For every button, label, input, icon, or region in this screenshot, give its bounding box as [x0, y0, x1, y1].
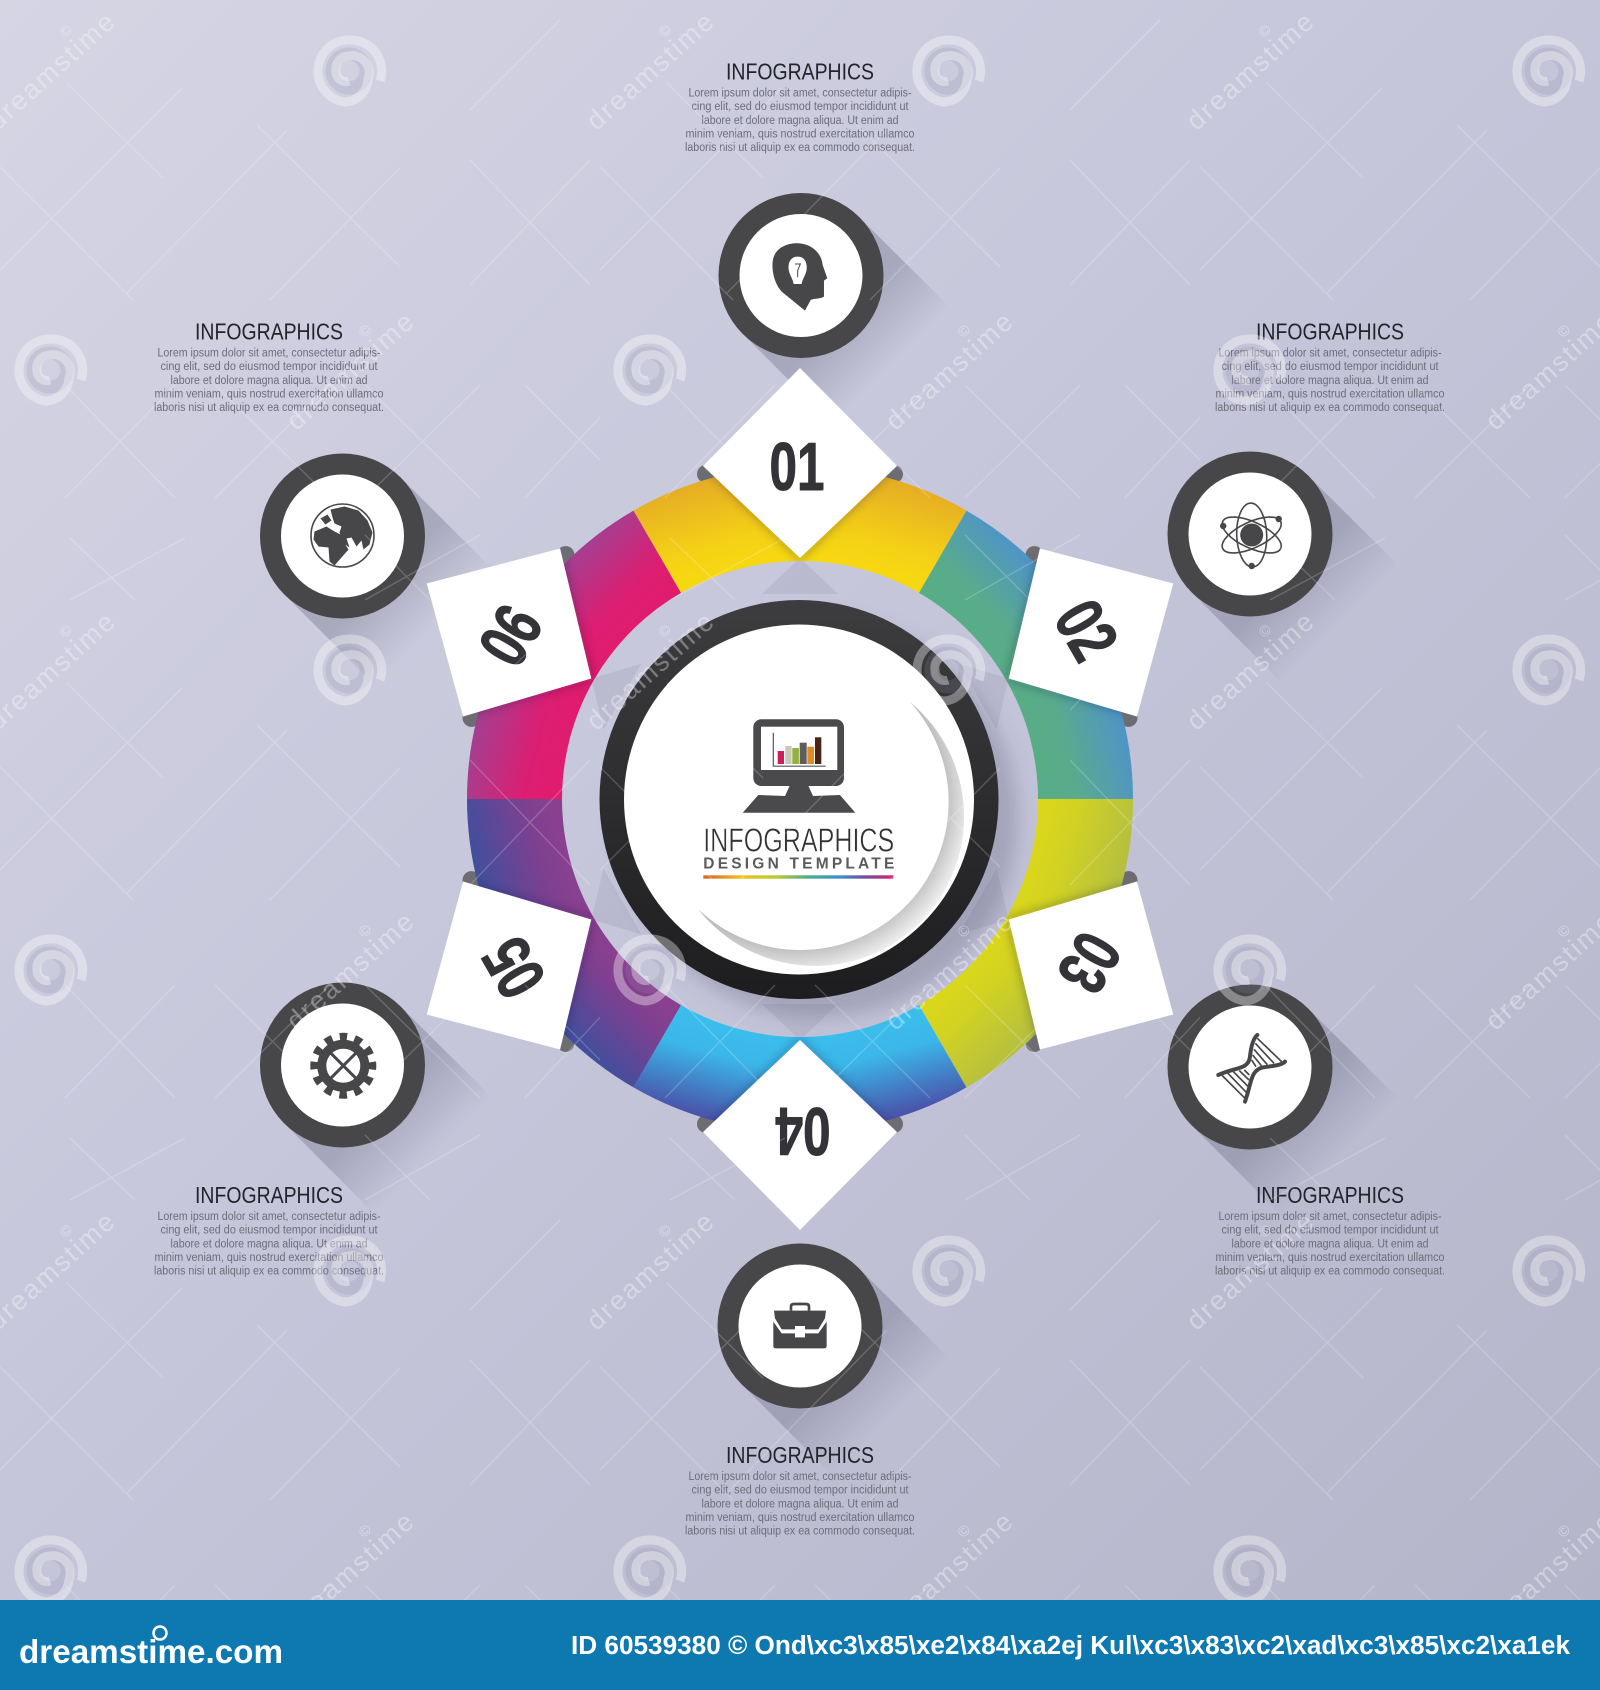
watermark overlay: ©	[355, 321, 375, 341]
watermark overlay: dreamstime	[879, 907, 1018, 1036]
text block 06: Lorem ipsum dolor sit amet, consectetur adipis-	[158, 348, 381, 360]
watermark overlay: dreamstime	[580, 607, 719, 736]
inner disc shading	[572, 558, 1028, 1040]
center subtitle: DESIGN TEMPLATE	[703, 855, 894, 872]
watermark overlay: dreamstime	[1180, 7, 1319, 136]
text block 04	[685, 1442, 915, 1538]
watermark overlay: ©	[355, 1521, 375, 1541]
center badge	[600, 600, 998, 999]
node 06: globe	[260, 454, 492, 686]
icon: gear	[314, 1037, 372, 1095]
segment 05 purple	[428, 758, 705, 1110]
watermark overlay: ©	[56, 621, 76, 641]
watermark overlay: ©	[1255, 1221, 1275, 1241]
text block 05	[154, 1182, 384, 1278]
text block 04: minim veniam, quis nostrud exercitation ullamco	[686, 1512, 914, 1524]
text block 06	[154, 318, 384, 414]
text block 03: minim veniam, quis nostrud exercitation ullamco	[1216, 1252, 1444, 1264]
text block 02: cing elit, sed do eiusmod tempor incididunt ut	[1222, 361, 1439, 373]
text block 01	[685, 58, 915, 154]
segment 02 green	[895, 488, 1172, 840]
watermark overlay: dreamstime	[280, 1507, 419, 1636]
text block 01: Lorem ipsum dolor sit amet, consectetur adipis-	[688, 88, 912, 100]
watermark overlay: dreamstime	[580, 1207, 719, 1336]
segment 01 yellow	[634, 466, 966, 593]
segment 04 cyan	[634, 1005, 966, 1132]
node 02: atom	[1168, 452, 1400, 684]
text block 04: INFOGRAPHICS	[726, 1442, 874, 1468]
watermark overlay: dreamstime	[879, 1507, 1018, 1636]
text block 01: minim veniam, quis nostrud exercitation ullamco	[686, 128, 914, 140]
icon: globe	[311, 504, 374, 567]
segment 06 magenta	[428, 488, 705, 840]
watermark overlay: dreamstime	[580, 7, 719, 136]
text block 02: laboris nisi ut aliquip ex ea commodo consequat.	[1215, 402, 1445, 414]
tab corners behind the ring	[459, 465, 1141, 1133]
watermark overlay: dreamstime	[1180, 607, 1319, 736]
footer logo: dreamstime.com	[19, 1633, 283, 1670]
text block 03: laboris nisi ut aliquip ex ea commodo consequat.	[1215, 1266, 1445, 1278]
text block 03	[1215, 1182, 1445, 1278]
text block 02: labore et dolore magna aliqua. Ut enim ad	[1232, 375, 1428, 387]
watermark overlay: ©	[954, 321, 974, 341]
text block 06: laboris nisi ut aliquip ex ea commodo consequat.	[154, 402, 384, 414]
watermark overlay: dreamstime	[1180, 1207, 1319, 1336]
text block 03: Lorem ipsum dolor sit amet, consectetur adipis-	[1218, 1211, 1442, 1223]
text block 06: INFOGRAPHICS	[195, 318, 343, 344]
rainbow underline	[703, 875, 893, 879]
footer credit: ID 60539380 © Ond\xc3\x85\xe2\x84\xa2ej Kul\xc3\x83\xc2\xad\xc3\x85\xc2\xa1ek	[571, 1632, 1571, 1660]
number tab 01	[703, 368, 897, 558]
number tab 03	[960, 835, 1222, 1099]
text block 03: cing elit, sed do eiusmod tempor incididunt ut	[1222, 1225, 1439, 1237]
center title: INFOGRAPHICS	[703, 821, 894, 858]
text block 03: labore et dolore magna aliqua. Ut enim ad	[1232, 1238, 1428, 1250]
watermark overlay: ©	[1554, 921, 1574, 941]
watermark overlay: ©	[655, 21, 675, 41]
watermark overlay: ©	[355, 921, 375, 941]
number tab 06	[378, 499, 640, 763]
text block 06: cing elit, sed do eiusmod tempor incididunt ut	[160, 361, 378, 373]
text block 02: Lorem ipsum dolor sit amet, consectetur adipis-	[1218, 348, 1442, 360]
watermark overlay: dreamstime	[879, 307, 1018, 436]
number tab 05	[378, 835, 640, 1099]
text block 01: cing elit, sed do eiusmod tempor incididunt ut	[692, 101, 909, 113]
text block 02	[1215, 318, 1445, 414]
text block 05: cing elit, sed do eiusmod tempor incididunt ut	[160, 1225, 378, 1237]
node 01: head with lightbulb	[718, 193, 951, 426]
text block 06: minim veniam, quis nostrud exercitation ullamco	[154, 388, 384, 400]
text block 04: labore et dolore magna aliqua. Ut enim ad	[702, 1498, 898, 1510]
text block 01: laboris nisi ut aliquip ex ea commodo consequat.	[685, 142, 915, 154]
footer logo spiral	[154, 1626, 166, 1640]
watermark overlay: dreamstime	[280, 307, 419, 436]
text block 02: minim veniam, quis nostrud exercitation ullamco	[1216, 388, 1444, 400]
watermark overlay: ©	[954, 1521, 974, 1541]
text block 01: labore et dolore magna aliqua. Ut enim ad	[702, 115, 898, 127]
watermark overlay: ©	[56, 1221, 76, 1241]
number tab 05: 05	[467, 925, 561, 1010]
number tab 01: 01	[770, 429, 824, 505]
watermark overlay: dreamstime	[280, 907, 419, 1036]
panel: central ring diagram	[426, 368, 1174, 1230]
watermark overlay: ©	[655, 621, 675, 641]
number tab 04: 04	[775, 1093, 830, 1169]
segment 03 lime	[895, 758, 1172, 1110]
text block 03: INFOGRAPHICS	[1256, 1182, 1404, 1208]
text block 02: INFOGRAPHICS	[1256, 318, 1404, 344]
number tab 04	[703, 1040, 897, 1230]
text block 06: labore et dolore magna aliqua. Ut enim ad	[170, 375, 368, 387]
node 05: gear	[260, 982, 492, 1215]
icon: DNA helix	[1218, 1035, 1285, 1102]
watermark overlay: ©	[1255, 21, 1275, 41]
footer bar	[0, 1600, 1600, 1690]
text block 04: Lorem ipsum dolor sit amet, consectetur adipis-	[688, 1471, 912, 1483]
number tab 02: 02	[1039, 588, 1133, 673]
tab shadows on the ring	[478, 477, 1122, 1120]
rainbow ring segments	[428, 466, 1172, 1132]
watermark overlay: ©	[954, 921, 974, 941]
number tab 03: 03	[1042, 920, 1136, 1005]
number tab 02	[960, 499, 1222, 763]
text block 01: INFOGRAPHICS	[726, 58, 874, 84]
icon: briefcase	[773, 1304, 827, 1348]
text block 05: labore et dolore magna aliqua. Ut enim ad	[170, 1238, 368, 1250]
watermark overlay: ©	[1554, 321, 1574, 341]
node 04: briefcase	[718, 1244, 950, 1476]
number tab 06: 06	[464, 593, 558, 678]
icon: computer with bar chart	[743, 719, 855, 813]
node 03: DNA	[1168, 984, 1400, 1217]
text block 05: Lorem ipsum dolor sit amet, consectetur adipis-	[158, 1211, 381, 1223]
text block 04: cing elit, sed do eiusmod tempor incididunt ut	[692, 1485, 909, 1497]
peeled paper shadow	[698, 702, 964, 966]
watermark overlay: ©	[655, 1221, 675, 1241]
icon: head	[772, 243, 827, 311]
text block 04: laboris nisi ut aliquip ex ea commodo consequat.	[685, 1526, 915, 1538]
watermark overlay: ©	[1255, 621, 1275, 641]
text block 05: minim veniam, quis nostrud exercitation ullamco	[154, 1252, 384, 1264]
watermark overlay: ©	[1554, 1521, 1574, 1541]
watermark overlay: ©	[56, 21, 76, 41]
text block 05: laboris nisi ut aliquip ex ea commodo consequat.	[154, 1266, 384, 1278]
text block 05: INFOGRAPHICS	[195, 1182, 343, 1208]
icon: atom	[1217, 502, 1286, 569]
